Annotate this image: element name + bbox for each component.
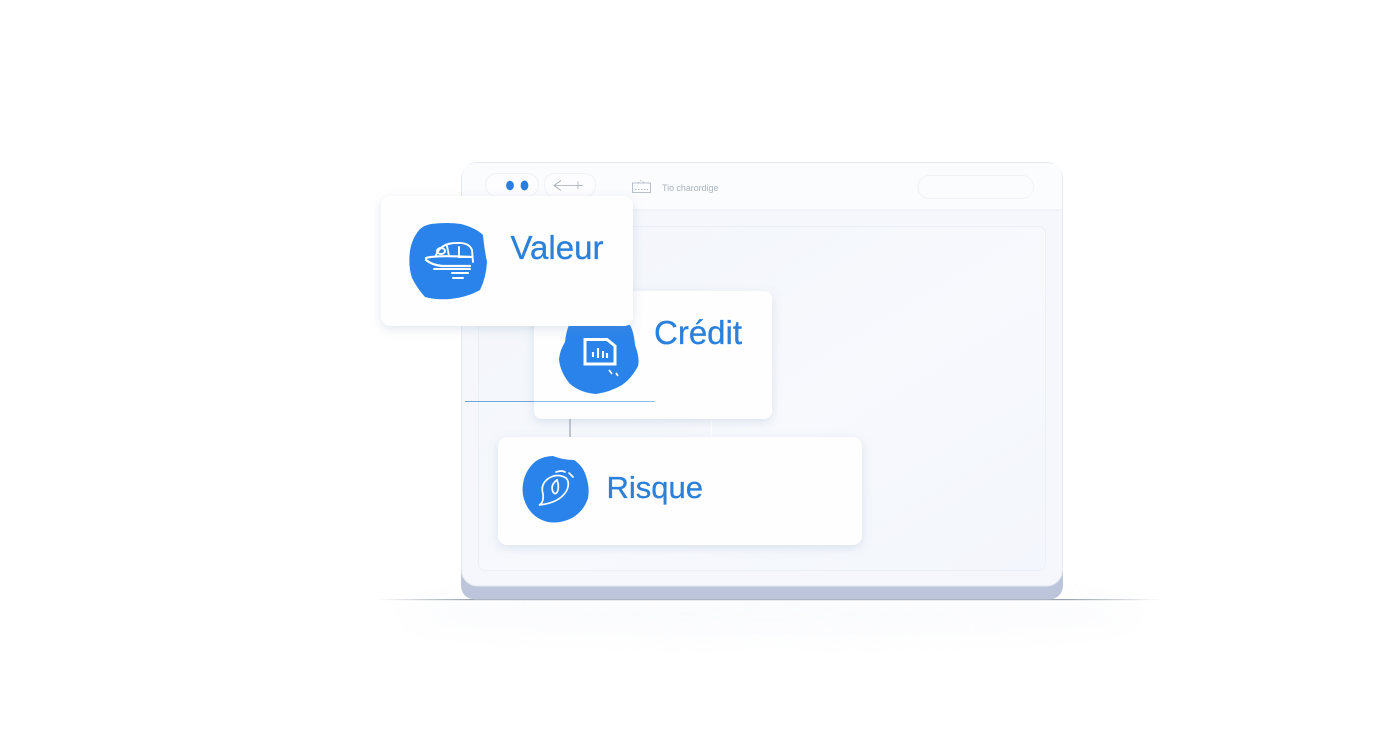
window header bar: [462, 163, 1062, 210]
window base: [461, 570, 1063, 600]
label: Valeur: Valeur: [510, 229, 603, 266]
label: Risque: Risque: [606, 470, 703, 505]
icon: vehicle: [409, 223, 487, 299]
window controls pill: [486, 174, 538, 196]
card: Valeur: [381, 196, 633, 326]
icon: leaf shield: [523, 456, 589, 522]
floor shadow: [400, 594, 1140, 634]
card: Risque: [498, 437, 862, 545]
connector line vertical light: [711, 418, 712, 438]
connector line horizontal: [465, 401, 535, 402]
label: Crédit: Crédit: [654, 314, 742, 351]
inner content panel: [478, 226, 1046, 570]
connector line vertical dark: [570, 418, 571, 438]
window body: [462, 162, 1062, 586]
connector line over card: [534, 401, 655, 402]
icon: chart document: [559, 325, 639, 394]
navigation arrows pill: [544, 174, 596, 196]
floor line: [376, 599, 1162, 600]
search field: [918, 176, 1034, 198]
tab label: Tio charordige: [662, 183, 718, 193]
tab icon: [632, 180, 650, 192]
card: Crédit: [534, 291, 772, 419]
browser window: [461, 162, 1063, 600]
